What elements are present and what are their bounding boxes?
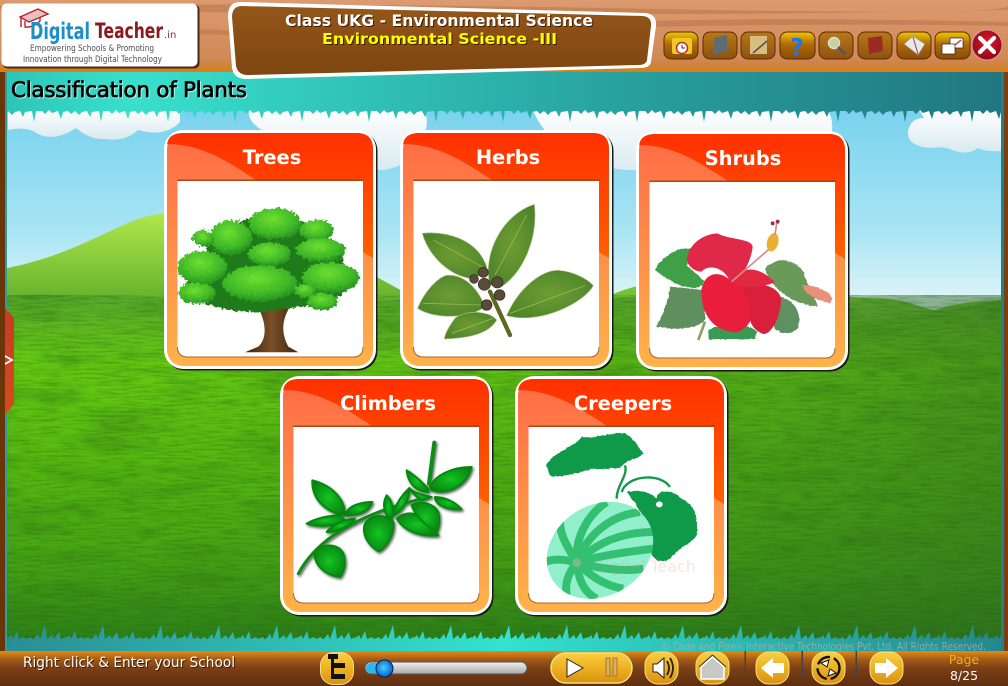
icon: graduation cap: [20, 9, 48, 27]
icon: resize windows: [935, 32, 970, 59]
divider: [744, 651, 746, 678]
logo wordmark: Teacher: [95, 19, 163, 43]
logo wordmark: [30, 19, 176, 45]
icon: help question mark: ?: [790, 35, 804, 61]
watermark: Digital Teach: [593, 557, 696, 576]
icon: outline tree button: [320, 652, 354, 684]
heading: Shrubs: Shrubs: [705, 147, 781, 170]
page counter: Page: [949, 652, 979, 667]
icon: close button: [972, 30, 1002, 60]
header plaque: [228, 2, 656, 79]
logo wordmark: .in: [164, 30, 176, 41]
icon: clock folder: [664, 32, 698, 59]
image: herb leaves: [418, 204, 593, 339]
toolbar icons: [664, 30, 1002, 61]
panel: Herbs: [400, 130, 614, 370]
heading: Trees: Trees: [243, 146, 301, 169]
logo panel: [2, 4, 200, 68]
icon: next arrow button: [870, 652, 903, 684]
panel: Creepers: [515, 376, 728, 618]
heading: Climbers: Climbers: [340, 392, 436, 415]
logo tagline: [23, 44, 162, 65]
icon: dictionary book: [858, 32, 892, 59]
panel: Shrubs: [636, 131, 850, 372]
image: climber vine: [298, 443, 472, 577]
image: watermelon creeper: [546, 432, 698, 599]
bottom teal band: [7, 639, 1002, 652]
icon: home button: [696, 652, 729, 684]
image: hibiscus flower: [655, 220, 833, 340]
header subtitle: Environmental Science -III: [322, 30, 557, 48]
panel: Climbers: [280, 376, 494, 616]
top wooden bar: [0, 0, 1008, 72]
icon: notepad: [741, 32, 775, 59]
icon: magnifier: [819, 32, 853, 59]
header title: Class UKG - Environmental Science: [285, 11, 593, 30]
icon: reference book: [703, 32, 737, 59]
heading: Herbs: Herbs: [476, 146, 540, 169]
slider: [365, 660, 527, 677]
divider: [856, 651, 857, 678]
icon: sound button: [645, 652, 678, 684]
image: tree: [178, 208, 359, 352]
icon: help question mark: [780, 32, 815, 61]
background landscape: [7, 108, 1002, 640]
panel: Trees: [164, 130, 378, 370]
icon: refresh button: [812, 652, 845, 684]
play and pause control: [551, 653, 632, 683]
bottom control bar: [0, 651, 1008, 686]
heading: Creepers: Creepers: [574, 392, 672, 415]
clouds: [8, 108, 1002, 174]
logo wordmark: Digital: [30, 19, 90, 45]
page heading: Classification of Plants: [11, 78, 247, 103]
icon: open book: [897, 32, 931, 59]
top teal band: [7, 72, 1002, 109]
page counter: [949, 652, 979, 683]
logo tagline: Innovation through Digital Technology: [23, 55, 162, 65]
logo tagline: Empowering Schools & Promoting: [30, 44, 154, 54]
status text: Right click & Enter your School: [23, 655, 235, 671]
divider: [802, 651, 803, 678]
page counter: 8/25: [950, 668, 978, 683]
icon: back arrow button: [756, 652, 789, 684]
left side tab: [5, 308, 14, 415]
